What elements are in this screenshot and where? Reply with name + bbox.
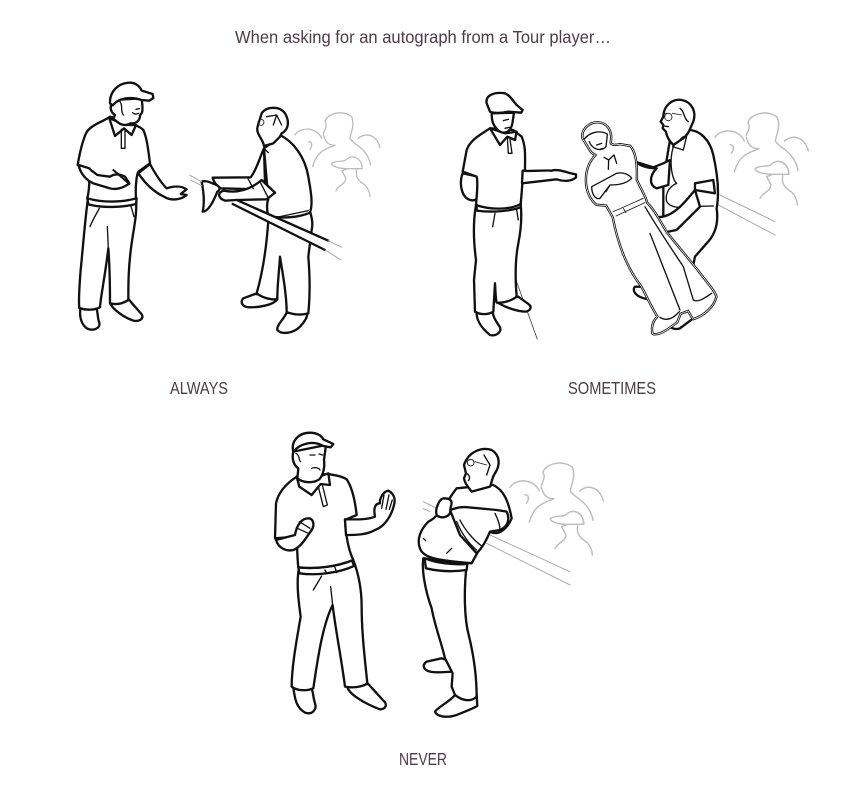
illustration: player offering a hand and crowd member with cap	[78, 83, 380, 333]
tour player	[275, 433, 395, 713]
panel: never	[275, 433, 603, 769]
rope barrier	[423, 502, 570, 585]
near arm	[219, 180, 275, 201]
illustration: player holding up hand and fan lifting shirt	[275, 433, 603, 717]
crowd silhouettes	[510, 463, 603, 555]
tour player	[78, 83, 187, 330]
label: always: ALWAYS	[170, 378, 228, 398]
far arm	[213, 148, 265, 189]
crowd silhouettes	[295, 113, 380, 197]
fan	[190, 108, 342, 333]
label: never: NEVER	[399, 749, 447, 769]
tour player	[461, 93, 576, 339]
panel: always	[78, 83, 380, 398]
illustration: player, fan and cardboard cutout	[461, 93, 808, 339]
title: When asking for an autograph from a Tour player…	[235, 27, 611, 47]
rope barrier	[233, 200, 342, 259]
crowd silhouettes	[715, 113, 808, 205]
autograph cap	[202, 181, 220, 212]
fan	[419, 449, 512, 717]
rope barrier	[718, 195, 775, 235]
panel: sometimes	[461, 93, 808, 398]
cardboard cutout	[583, 123, 716, 334]
fan	[634, 100, 718, 329]
label: sometimes: SOMETIMES	[568, 378, 656, 398]
